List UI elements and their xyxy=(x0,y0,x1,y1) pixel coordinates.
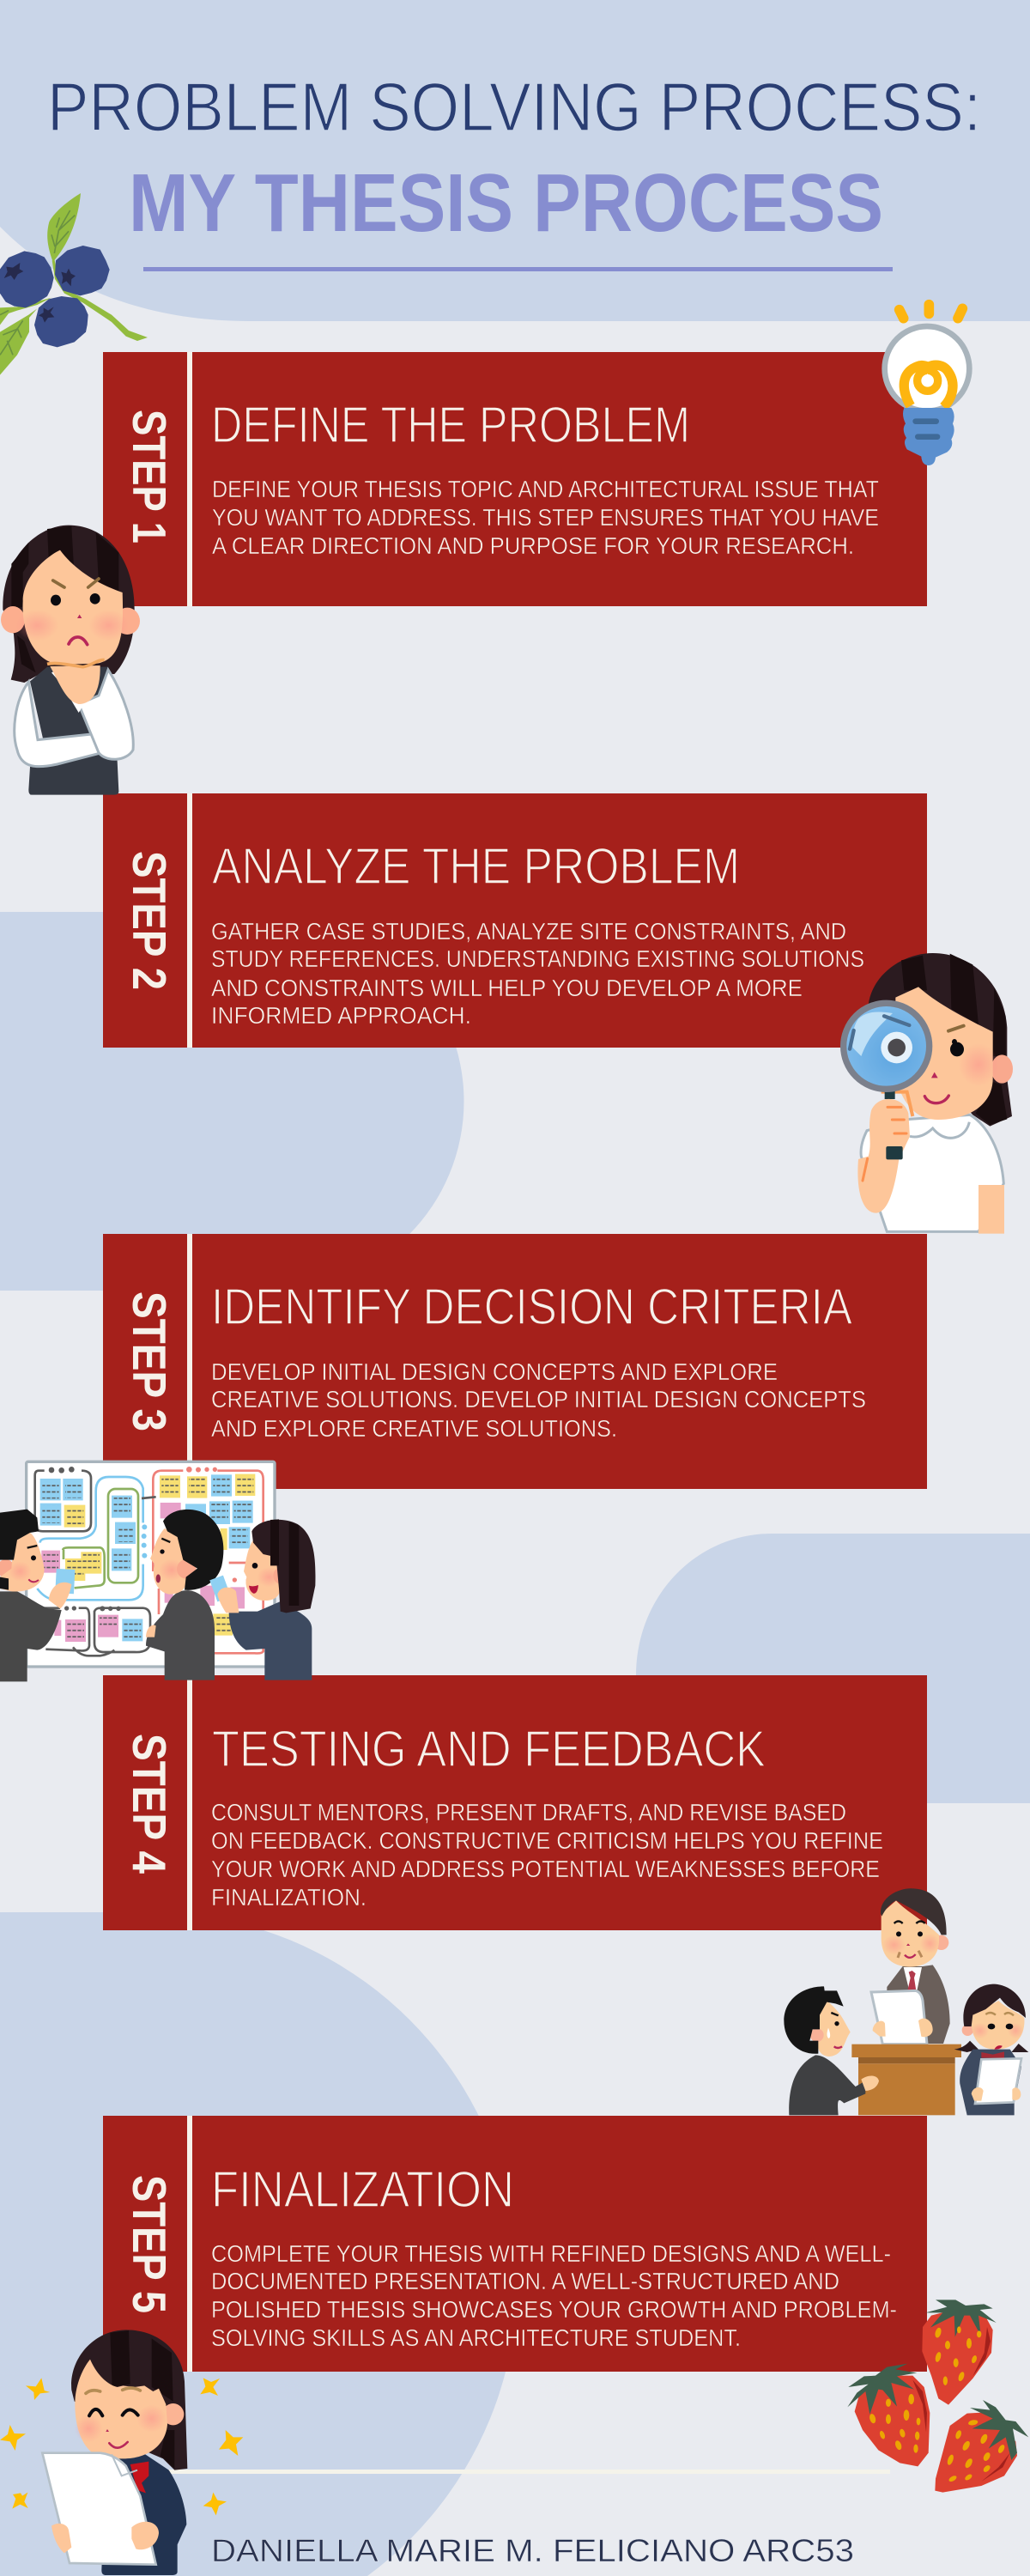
title xyxy=(47,69,981,249)
background shape: large lower circle xyxy=(0,1912,518,2576)
step 1 label: STEP 1 xyxy=(123,410,176,544)
step 2 heading: ANALYZE THE PROBLEM xyxy=(212,838,740,895)
woman on the right xyxy=(209,1519,315,1680)
step 4 label: STEP 4 xyxy=(123,1734,176,1874)
podium xyxy=(851,2044,961,2115)
illustration: presentation at podium xyxy=(784,1888,1028,2115)
step 5 body xyxy=(211,2240,897,2351)
background shape: left pill xyxy=(0,912,464,1291)
step 2 label: STEP 2 xyxy=(123,851,176,990)
panel: step 5 xyxy=(103,2116,927,2372)
sparkle stars xyxy=(0,2378,243,2515)
step 3 body: CREATIVE SOLUTIONS. DEVELOP INITIAL DESIGN CONCEPTS xyxy=(211,1386,866,1413)
illustration: happy girl with paper and stars xyxy=(0,2330,243,2575)
step 4 body: FINALIZATION. xyxy=(211,1884,367,1911)
step 5 heading: FINALIZATION xyxy=(211,2161,514,2218)
step 2 body: GATHER CASE STUDIES, ANALYZE SITE CONSTRAINTS, AND xyxy=(211,918,846,945)
step 3 body: DEVELOP INITIAL DESIGN CONCEPTS AND EXPLORE xyxy=(211,1358,778,1385)
panel: step 3 xyxy=(103,1234,927,1489)
step 5 label: STEP 5 xyxy=(123,2175,176,2313)
step 2 body xyxy=(211,918,864,1029)
panel: step 2 xyxy=(103,793,927,1048)
step 5 body: DOCUMENTED PRESENTATION. A WELL-STRUCTURED AND xyxy=(211,2268,839,2294)
step 5 body: POLISHED THESIS SHOWCASES YOUR GROWTH AND PROBLEM- xyxy=(211,2296,897,2323)
title line 2: MY THESIS PROCESS xyxy=(129,157,883,249)
illustration: thinking girl xyxy=(1,526,140,795)
step 1 body: DEFINE YOUR THESIS TOPIC AND ARCHITECTURAL ISSUE THAT xyxy=(212,476,879,502)
step 4 body: ON FEEDBACK. CONSTRUCTIVE CRITICISM HELPS YOU REFINE xyxy=(211,1827,883,1854)
icon: light bulb xyxy=(885,305,969,465)
step 5 body: COMPLETE YOUR THESIS WITH REFINED DESIGNS AND A WELL- xyxy=(211,2240,891,2267)
step 1 body: YOU WANT TO ADDRESS. THIS STEP ENSURES THAT YOU HAVE xyxy=(212,504,879,531)
icon: strawberries xyxy=(847,2300,1028,2493)
man in the middle xyxy=(146,1510,223,1680)
man on the left xyxy=(0,1510,75,1681)
background shape: right block xyxy=(636,1534,1030,1803)
step 1 body xyxy=(212,476,879,559)
title underline xyxy=(143,267,893,271)
step 2 body: AND CONSTRAINTS WILL HELP YOU DEVELOP A MORE xyxy=(211,975,803,1001)
step 4 body: CONSULT MENTORS, PRESENT DRAFTS, AND REVISE BASED xyxy=(211,1799,846,1826)
strawberry right xyxy=(935,2400,1028,2493)
step 4 heading: TESTING AND FEEDBACK xyxy=(212,1721,766,1777)
illustration: team at sticky-note board xyxy=(0,1461,315,1681)
seated student left xyxy=(784,1986,879,2115)
step 3 body xyxy=(211,1358,866,1442)
background shape: header xyxy=(0,0,1030,321)
step 1 heading: DEFINE THE PROBLEM xyxy=(211,397,690,453)
strawberry top right xyxy=(922,2300,997,2405)
step 1 body: A CLEAR DIRECTION AND PURPOSE FOR YOUR RESEARCH. xyxy=(212,532,854,559)
panel: step 4 xyxy=(103,1675,927,1930)
step 2 body: INFORMED APPROACH. xyxy=(211,1002,471,1029)
footer divider xyxy=(143,2470,890,2474)
step 3 body: AND EXPLORE CREATIVE SOLUTIONS. xyxy=(211,1415,617,1442)
step 2 body: STUDY REFERENCES. UNDERSTANDING EXISTING SOLUTIONS xyxy=(211,945,864,972)
step 3 label: STEP 3 xyxy=(123,1291,176,1431)
author name: DANIELLA MARIE M. FELICIANO ARC53 xyxy=(211,2533,854,2568)
step 4 body xyxy=(211,1799,883,1911)
strawberry left xyxy=(847,2364,930,2466)
illustration: girl with magnifying glass xyxy=(844,953,1013,1234)
step 4 body: YOUR WORK AND ADDRESS POTENTIAL WEAKNESSES BEFORE xyxy=(211,1856,880,1882)
board xyxy=(27,1461,275,1667)
step 3 heading: IDENTIFY DECISION CRITERIA xyxy=(211,1279,853,1335)
panel: step 1 xyxy=(103,352,927,606)
icon: blueberries xyxy=(0,193,148,375)
step 5 body: SOLVING SKILLS AS AN ARCHITECTURE STUDENT. xyxy=(211,2324,741,2351)
presenter xyxy=(871,1888,950,2044)
seated student right xyxy=(954,1984,1028,2115)
